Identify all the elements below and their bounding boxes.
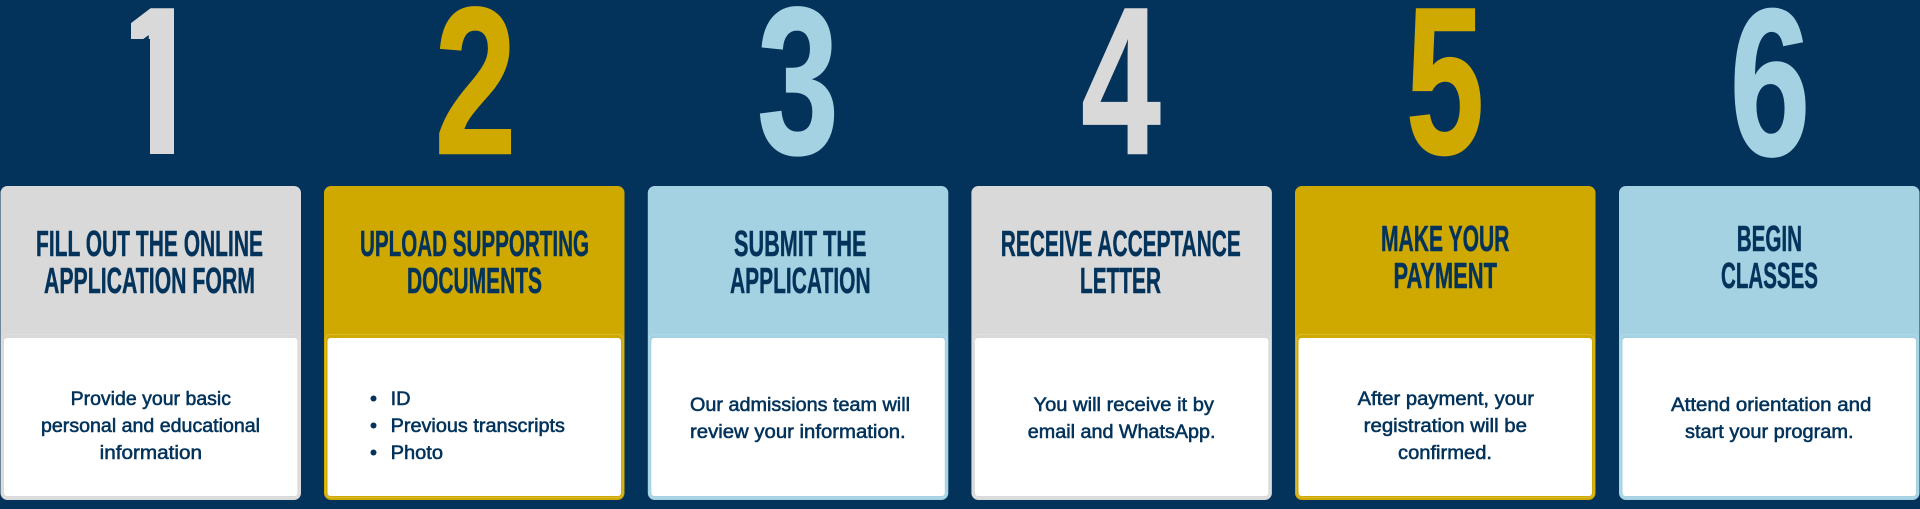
- panel: step 3 card: [648, 186, 948, 500]
- white content box: [975, 338, 1268, 496]
- heading: FILL OUT THE ONLINE: [36, 223, 263, 264]
- panel: step 1 card: [0, 186, 301, 500]
- heading: DOCUMENTS: [407, 260, 542, 301]
- card background: [1295, 186, 1596, 500]
- panel divider outline: [326, 334, 623, 498]
- description: review your information.: [690, 422, 906, 443]
- panel divider outline: [1620, 334, 1918, 498]
- description: information: [100, 443, 202, 464]
- bullet list: [370, 389, 565, 464]
- description: personal and educational: [41, 416, 260, 437]
- panel: step 2 card: [324, 186, 624, 500]
- description: After payment, your: [1358, 389, 1535, 410]
- description: start your program.: [1685, 422, 1854, 443]
- card background: [1619, 186, 1920, 500]
- panel divider outline: [973, 334, 1270, 498]
- description: You will receive it by: [1034, 395, 1215, 416]
- card background: [324, 186, 624, 500]
- description: Our admissions team will: [690, 395, 910, 416]
- heading: LETTER: [1080, 260, 1161, 301]
- card background: [971, 186, 1272, 500]
- white content box: [1298, 338, 1592, 496]
- description: confirmed.: [1398, 443, 1492, 464]
- white content box: [1622, 338, 1916, 496]
- white content box: [4, 338, 298, 496]
- panel divider outline: [649, 334, 947, 498]
- white content box: [328, 338, 621, 496]
- heading: APPLICATION FORM: [44, 260, 255, 301]
- heading: MAKE YOUR: [1381, 218, 1509, 259]
- heading: CLASSES: [1721, 255, 1818, 296]
- heading: PAYMENT: [1394, 255, 1497, 296]
- panel: step 6 card: [1619, 186, 1920, 500]
- description: Provide your basic: [71, 389, 231, 410]
- card background: [0, 186, 301, 500]
- heading: APPLICATION: [730, 260, 871, 301]
- heading: UPLOAD SUPPORTING: [360, 223, 589, 264]
- panel divider outline: [1296, 334, 1594, 498]
- description: Attend orientation and: [1671, 395, 1871, 416]
- bullet list: ID: [391, 389, 411, 410]
- heading: SUBMIT THE: [734, 223, 866, 264]
- bullet list: Photo: [391, 443, 443, 464]
- heading: RECEIVE ACCEPTANCE: [1001, 223, 1241, 264]
- heading: BEGIN: [1737, 218, 1802, 259]
- panel: step 4 card: [971, 186, 1272, 500]
- bullet list: Previous transcripts: [391, 416, 565, 437]
- description: registration will be: [1364, 416, 1527, 437]
- white content box: [651, 338, 945, 496]
- card background: [648, 186, 948, 500]
- panel divider outline: [2, 334, 300, 498]
- panel: step 5 card: [1295, 186, 1596, 500]
- description: email and WhatsApp.: [1028, 422, 1216, 443]
